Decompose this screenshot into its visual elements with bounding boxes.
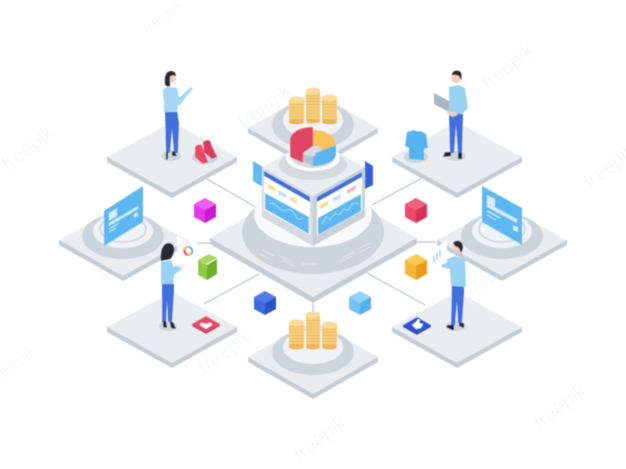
icon: shoes (192, 140, 218, 164)
cube: light blue (349, 291, 371, 315)
watermark: freepik (478, 39, 539, 94)
cube: green (198, 254, 217, 280)
hologram chart (177, 236, 198, 277)
icon: heart tile (192, 316, 220, 334)
platform: bottom centre (248, 321, 378, 399)
connector lines (197, 178, 436, 325)
platform: bottom left (107, 292, 237, 368)
person: woman top left (161, 71, 193, 161)
icon: blue block behind cube (253, 161, 263, 187)
icon: credit card right (482, 186, 522, 245)
platform: top left (107, 122, 237, 198)
icon: thumbs tile (403, 317, 431, 335)
platform: top right (392, 122, 522, 198)
platform: top centre (248, 91, 378, 170)
platform: centre (210, 178, 417, 303)
cube: dark blue (254, 291, 276, 315)
watermark: freepik (290, 411, 351, 466)
coins: top centre (289, 88, 337, 124)
platform: left middle (59, 205, 188, 281)
icon: t-shirt (404, 130, 428, 163)
watermark: freepik (95, 229, 156, 284)
watermark: freepik (462, 262, 508, 303)
watermark: freepik (195, 324, 256, 379)
person: man bottom right (431, 240, 466, 331)
platform: right middle (437, 205, 567, 281)
cube: crimson (405, 198, 427, 223)
left screen (264, 171, 310, 235)
watermark: freepik (320, 189, 381, 244)
platform: bottom right (392, 292, 522, 368)
person: woman bottom left (159, 236, 198, 331)
pie chart (279, 127, 347, 180)
person: man top right (434, 71, 468, 161)
cube: orange (405, 254, 427, 280)
cube: magenta (194, 198, 216, 223)
data cube (262, 139, 365, 246)
icon: credit card left (104, 186, 143, 246)
watermark: freepik (530, 379, 591, 434)
right screen (317, 172, 362, 236)
coins: bottom centre (289, 312, 337, 350)
watermark: freepik (235, 79, 296, 134)
